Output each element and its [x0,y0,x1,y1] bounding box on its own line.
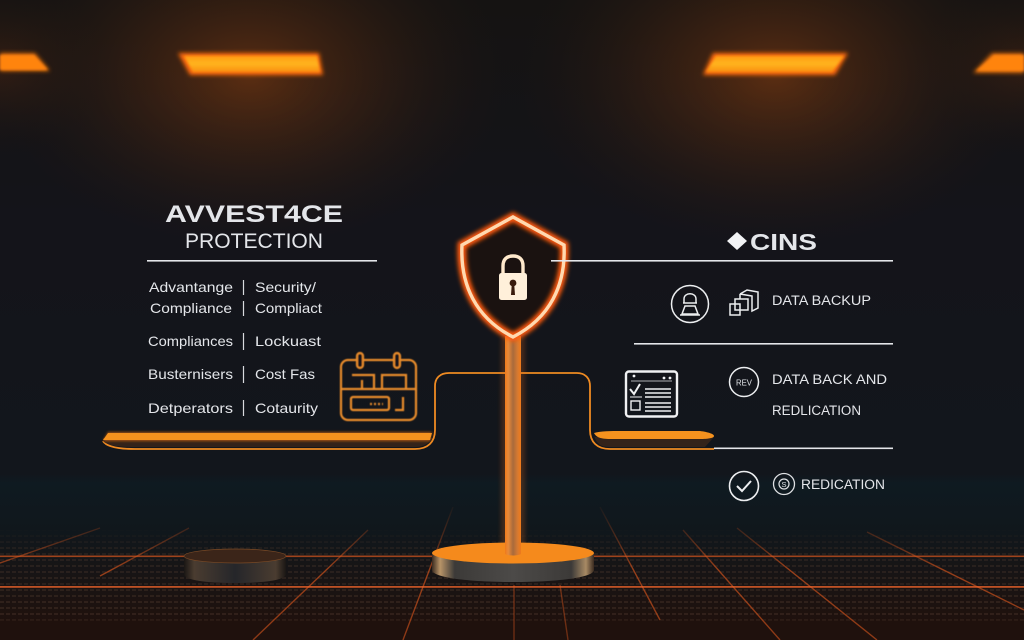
icon: check circle [730,472,758,500]
ceiling light: far left [0,53,50,71]
data backup label: DATA BACKUP [772,293,871,308]
left small disc [184,549,286,583]
left heading [165,201,343,253]
right heading: CINS [750,229,817,255]
icon: hacker circle [672,286,708,322]
icon: shield coin circle [774,474,794,494]
comparison list: Busternisers [148,366,233,382]
data back and redication label: REDLICATION [772,403,861,418]
icon: backup boxes [730,290,758,315]
left heading: PROTECTION [185,230,323,253]
main base disc [432,541,594,582]
central pole [501,336,525,558]
comparison list: Cost Fas [255,366,315,382]
comparison list: Cotaurity [255,400,318,416]
left heading: AVVEST4CE [165,201,343,228]
comparison list: Security/ [255,279,316,295]
comparison list: Compliact [255,300,322,316]
comparison list: Advantange [149,279,233,295]
floor grid [0,507,1024,640]
right platform [521,373,714,449]
redication label: REDICATION [801,477,885,492]
right heading [727,229,817,255]
data back and redication label [772,372,887,418]
ceiling light: far right [973,53,1024,73]
comparison list: Compliance [150,300,232,316]
data back and redication label: DATA BACK AND [772,372,887,387]
comparison list [148,279,322,416]
comparison list: Lockuast [255,333,321,349]
icon: checklist document [626,372,677,416]
shield with padlock [462,217,564,337]
icon: calendar [341,353,416,420]
ceiling light: centre left [178,53,323,75]
icon: rev circle: REV [736,378,752,388]
comparison list: Compliances [148,333,233,349]
ceiling light: centre right [703,53,848,75]
left platform [103,373,505,449]
icon: padlock [499,256,527,300]
icon: rev circle [730,368,758,396]
comparison list: Detperators [148,400,233,416]
icon: shield coin circle: S [782,480,787,489]
